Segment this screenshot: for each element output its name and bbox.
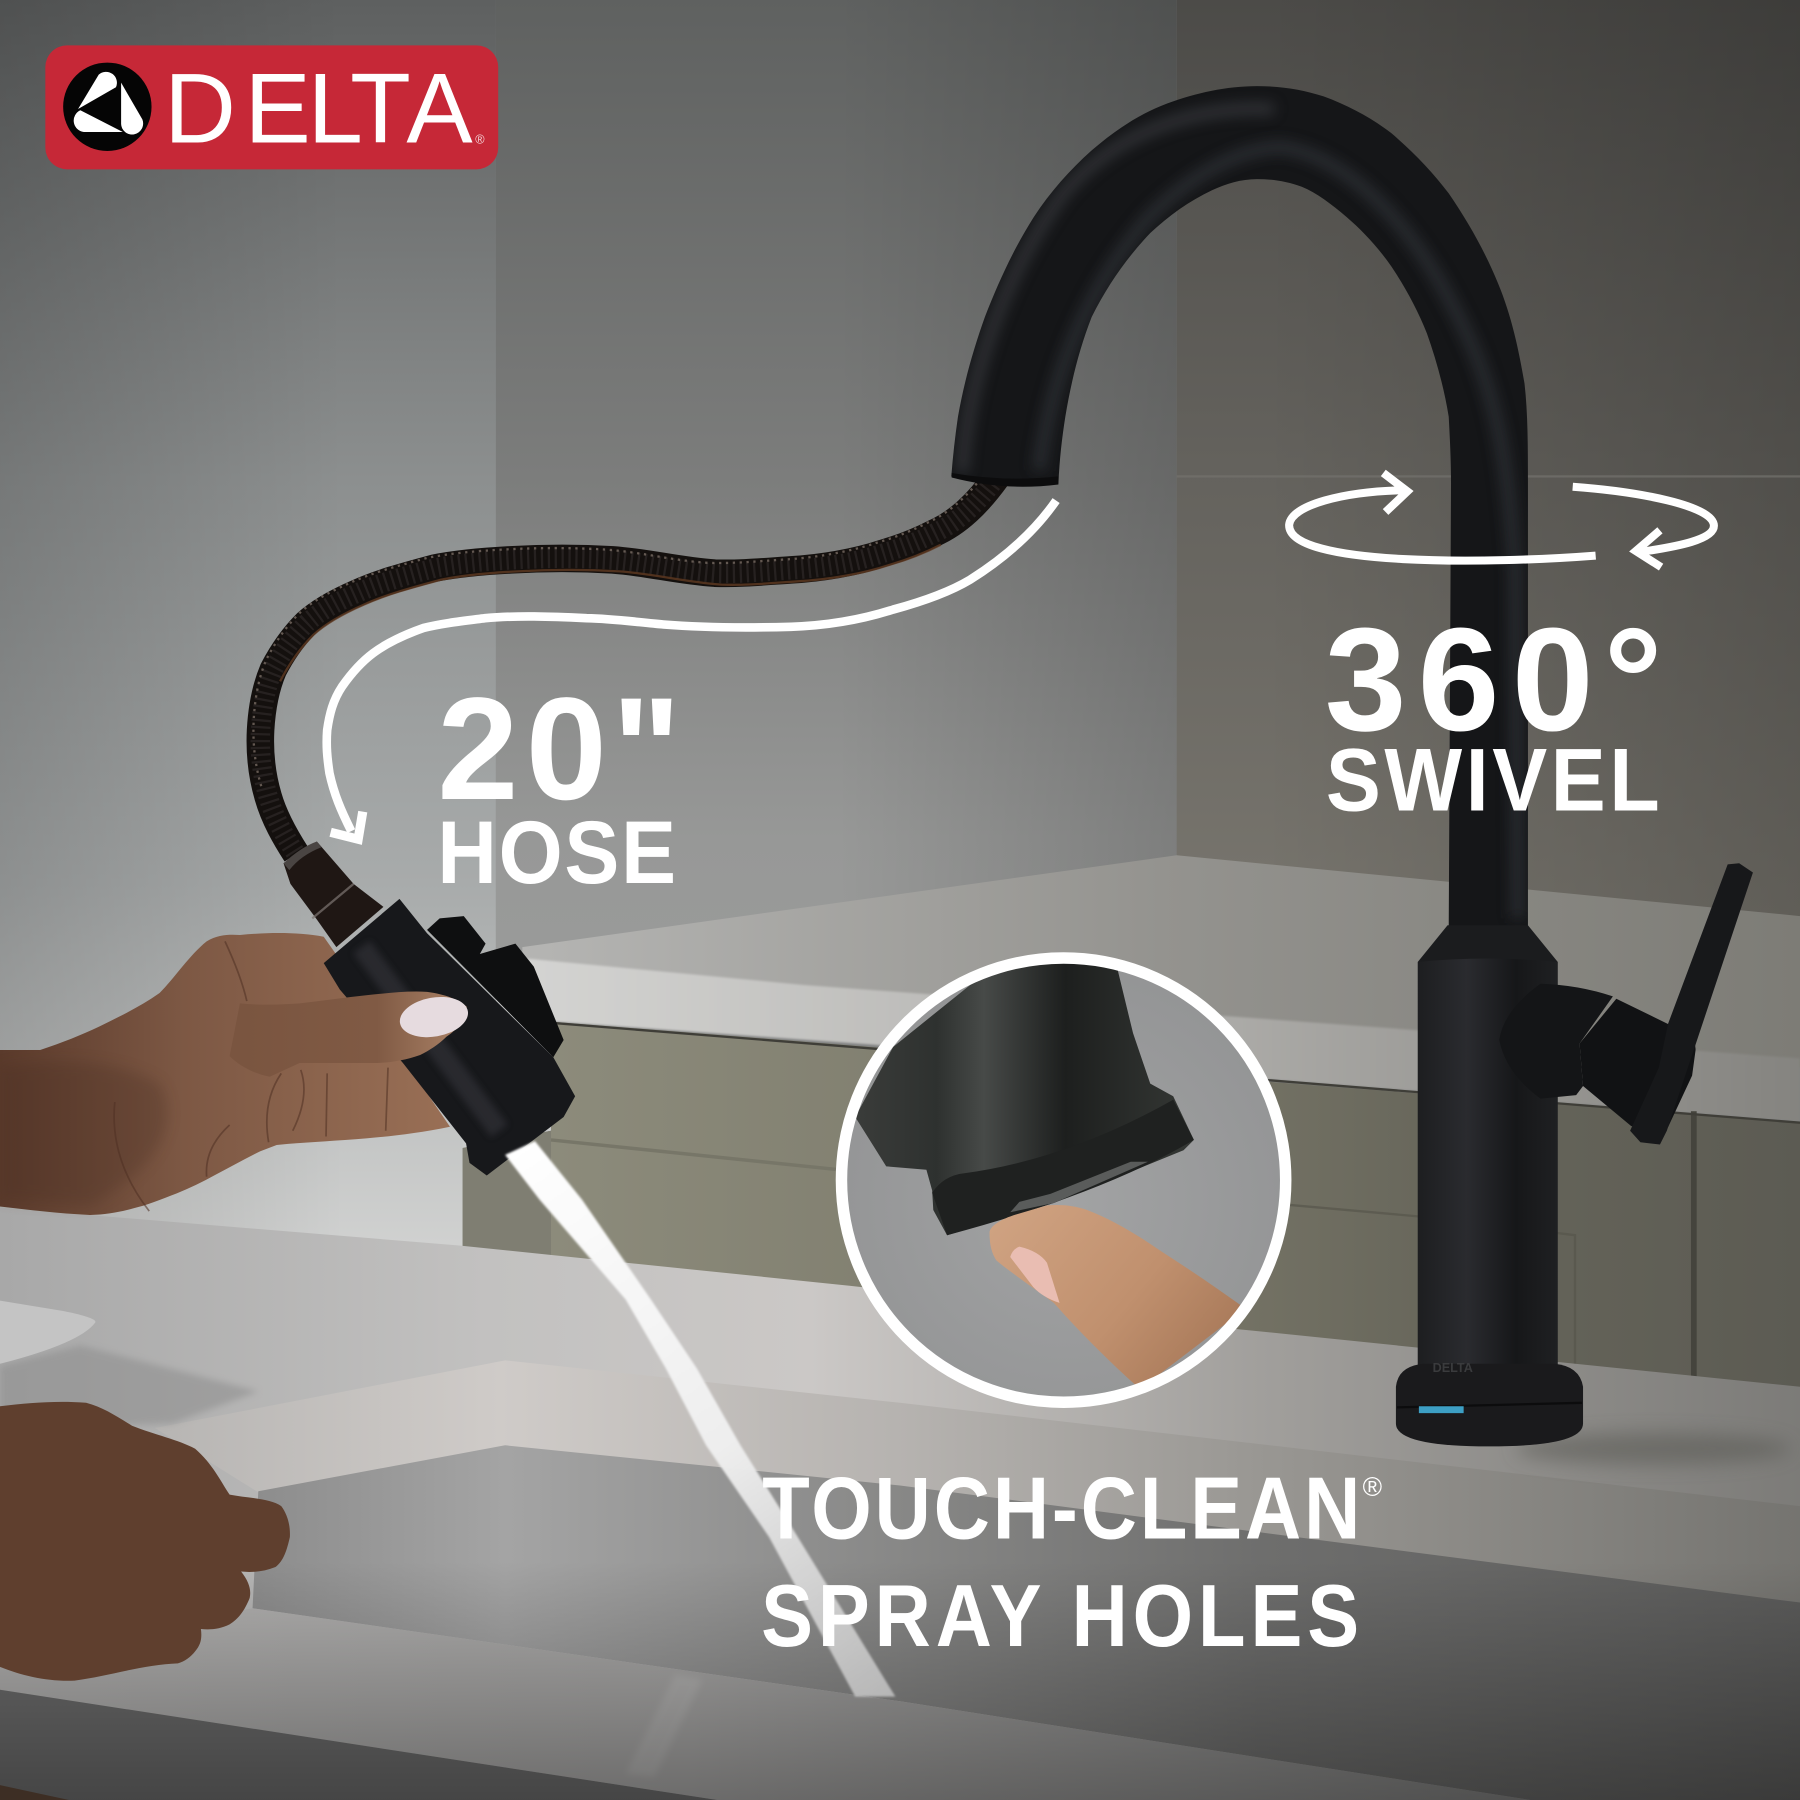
spout [951, 86, 1528, 928]
faucet [951, 86, 1753, 1446]
right wall [1177, 0, 1800, 1033]
label: touch-clean spray holes: TOUCH-CLEAN [762, 1459, 1360, 1557]
nozzle rim [932, 1100, 1194, 1235]
collar cone [1418, 925, 1558, 962]
wordmark: DELTA [164, 53, 473, 164]
water stream [505, 1141, 895, 1697]
second hand at sink [0, 1402, 290, 1681]
blue touch indicator [1419, 1406, 1464, 1413]
callout: touch-clean circle [841, 953, 1286, 1403]
plate shadow [0, 1345, 258, 1429]
base cabinets [463, 1022, 1800, 1395]
registered mark: ® [475, 132, 485, 146]
lower wall behind spray head [463, 953, 551, 1148]
Delta logo badge [45, 45, 498, 169]
label: 360 swivel: SWIVEL [1326, 730, 1660, 830]
front counter lip [0, 1608, 1530, 1800]
counter front face [0, 1690, 717, 1800]
swivel arrow left [1289, 473, 1596, 561]
middle wall [496, 0, 1177, 987]
label: 20 inch hose: HOSE [437, 803, 676, 903]
finger creases [114, 941, 388, 1211]
thumb [230, 992, 467, 1077]
back counter top [522, 855, 1800, 1068]
sink rim [155, 1360, 1800, 1607]
spray head connector [284, 841, 383, 947]
logo triangle mark [74, 72, 143, 135]
logo roundel [63, 63, 152, 151]
wrist shadow [0, 1062, 167, 1205]
label: touch-clean spray holes: ® [1363, 1472, 1383, 1502]
DELTA body mark: DELTA [1433, 1361, 1473, 1375]
counter strip bottom left [0, 1785, 69, 1800]
circle ring [841, 958, 1286, 1402]
faucet shadow on counter [1515, 1433, 1791, 1465]
spout highlights [962, 109, 1518, 918]
thumb nail [397, 992, 471, 1042]
label: 20 inch hose: 20" [437, 667, 681, 830]
plate at left [0, 1301, 95, 1364]
label: touch-clean spray holes [761, 1459, 1383, 1665]
sink basin [253, 1445, 1800, 1800]
fingertip [990, 1205, 1246, 1389]
spray nozzle close-up [855, 953, 1194, 1235]
hose arrow head [331, 812, 363, 839]
nozzle holes [1010, 1162, 1148, 1212]
faucet body [1418, 959, 1558, 1368]
hose length arrow [327, 501, 1056, 831]
spout mouth [952, 473, 1058, 487]
hand back and fingers [0, 933, 450, 1215]
left wall [0, 0, 496, 1263]
pull-down hose [253, 467, 996, 854]
spray head highlight [362, 947, 499, 1131]
spray head body [324, 899, 575, 1176]
hand holding spray head [0, 841, 575, 1215]
swivel rotation arrows [1289, 473, 1714, 567]
handle lever [1630, 863, 1753, 1145]
handle hub [1580, 999, 1696, 1127]
spray head fin [427, 916, 564, 1057]
label: 20 inch hose [437, 667, 681, 903]
handle connector [1499, 984, 1613, 1099]
back counter front edge [526, 959, 1800, 1122]
label: touch-clean spray holes: SPRAY HOLES [761, 1567, 1359, 1665]
base ring [1396, 1364, 1583, 1446]
bottom vignette [0, 1561, 1800, 1800]
reflection streak on lip [626, 1675, 703, 1777]
swivel arrow right [1573, 487, 1714, 567]
label: 360 swivel: 360° [1325, 598, 1662, 762]
fingernail [1010, 1247, 1060, 1303]
front counter [0, 1208, 1800, 1800]
